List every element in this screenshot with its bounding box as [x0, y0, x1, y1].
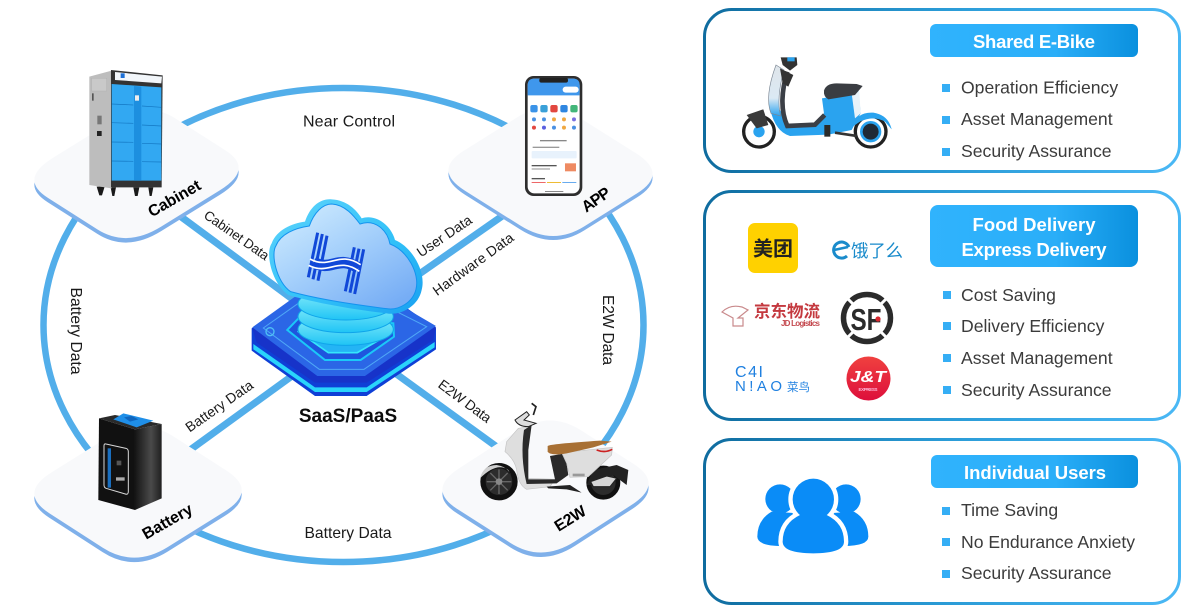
heading pill [930, 205, 1138, 267]
label: Battery: Battery [140, 501, 196, 543]
link label: Battery Data left: Battery Data [67, 288, 84, 375]
icon: battery pack [98, 413, 162, 510]
benefit list: Time Saving [961, 500, 1058, 520]
icon: cabinet [89, 70, 163, 196]
panel: Individual Users [704, 440, 1180, 604]
logo: J&T Express: J&T [850, 369, 887, 386]
benefit list: Asset Management [961, 109, 1113, 129]
label: Cabinet: Cabinet [145, 177, 205, 221]
heading pill [930, 24, 1138, 57]
logo: SF Express: SF [850, 302, 882, 337]
link label: Near Control: Near Control [303, 114, 395, 130]
link label: User Data: User Data [414, 211, 475, 260]
heading pill: Individual Users [964, 462, 1106, 483]
link label: Battery Data diagonal: Battery Data [182, 377, 256, 435]
logo: J&T Express: EXPRESS [858, 387, 878, 392]
heading pill: Express Delivery [962, 239, 1107, 260]
benefit list: Operation Efficiency [961, 78, 1118, 98]
benefit list: Delivery Efficiency [961, 316, 1105, 336]
logo: JD Logistics: JD Logistics [781, 319, 821, 328]
heading: SaaS/PaaS: SaaS/PaaS [299, 406, 397, 427]
logo: Ele.me: 饿了么 [851, 241, 903, 261]
link label: E2W Data right: E2W Data [599, 295, 616, 365]
logo: Meituan [748, 223, 798, 273]
link label: E2W Data diagonal: E2W Data [435, 376, 495, 426]
logo: JD Logistics: 京东物流 [754, 301, 820, 321]
panel: Shared E-Bike [704, 10, 1180, 172]
benefit list [942, 500, 1135, 583]
benefit list [942, 78, 1118, 161]
node: Battery [31, 413, 245, 563]
logo: Cainiao: 菜鸟 [787, 380, 810, 394]
label: APP: APP [579, 184, 614, 216]
logo: SF Express [844, 294, 890, 342]
benefit list: Cost Saving [961, 285, 1056, 305]
label: E2W: E2W [552, 502, 590, 535]
benefit list: Security Assurance [961, 563, 1112, 583]
benefit list: No Endurance Anxiety [961, 532, 1135, 552]
logo: Meituan: 美团 [753, 238, 793, 260]
logo: J&T Express [846, 356, 890, 400]
benefit list: Security Assurance [961, 380, 1112, 400]
node: E2W [439, 403, 652, 559]
outer data ring [44, 88, 644, 562]
icon: white scooter [480, 403, 628, 498]
link label: Cabinet Data: Cabinet Data [201, 207, 272, 264]
connector lines to the platform [180, 212, 508, 450]
H logo [308, 233, 364, 294]
heading pill [931, 455, 1138, 488]
heading pill: Shared E-Bike [973, 31, 1095, 52]
icon: smartphone [525, 76, 582, 196]
benefit list [943, 285, 1113, 400]
benefit list: Asset Management [961, 348, 1113, 368]
logo: JD Logistics [722, 301, 821, 328]
icon: users group [757, 479, 868, 553]
benefit list: Security Assurance [961, 141, 1112, 161]
logo: Cainiao: N!AO [735, 378, 782, 395]
server column [298, 288, 393, 345]
heading pill: Food Delivery [972, 214, 1096, 235]
node: Cabinet [26, 70, 247, 247]
logo: Cainiao: C4I [735, 364, 763, 381]
node: APP [446, 76, 655, 242]
panel: Food and Express Delivery [704, 192, 1180, 420]
link label: Battery Data bottom: Battery Data [304, 525, 392, 542]
link label: Hardware Data: Hardware Data [430, 229, 517, 299]
logo: Cainiao [735, 364, 810, 395]
center: SaaS/PaaS platform and cloud [252, 199, 436, 396]
platform base [252, 297, 436, 396]
icon: shared e-bike [744, 57, 892, 147]
icon: cloud with H logo [269, 199, 423, 314]
